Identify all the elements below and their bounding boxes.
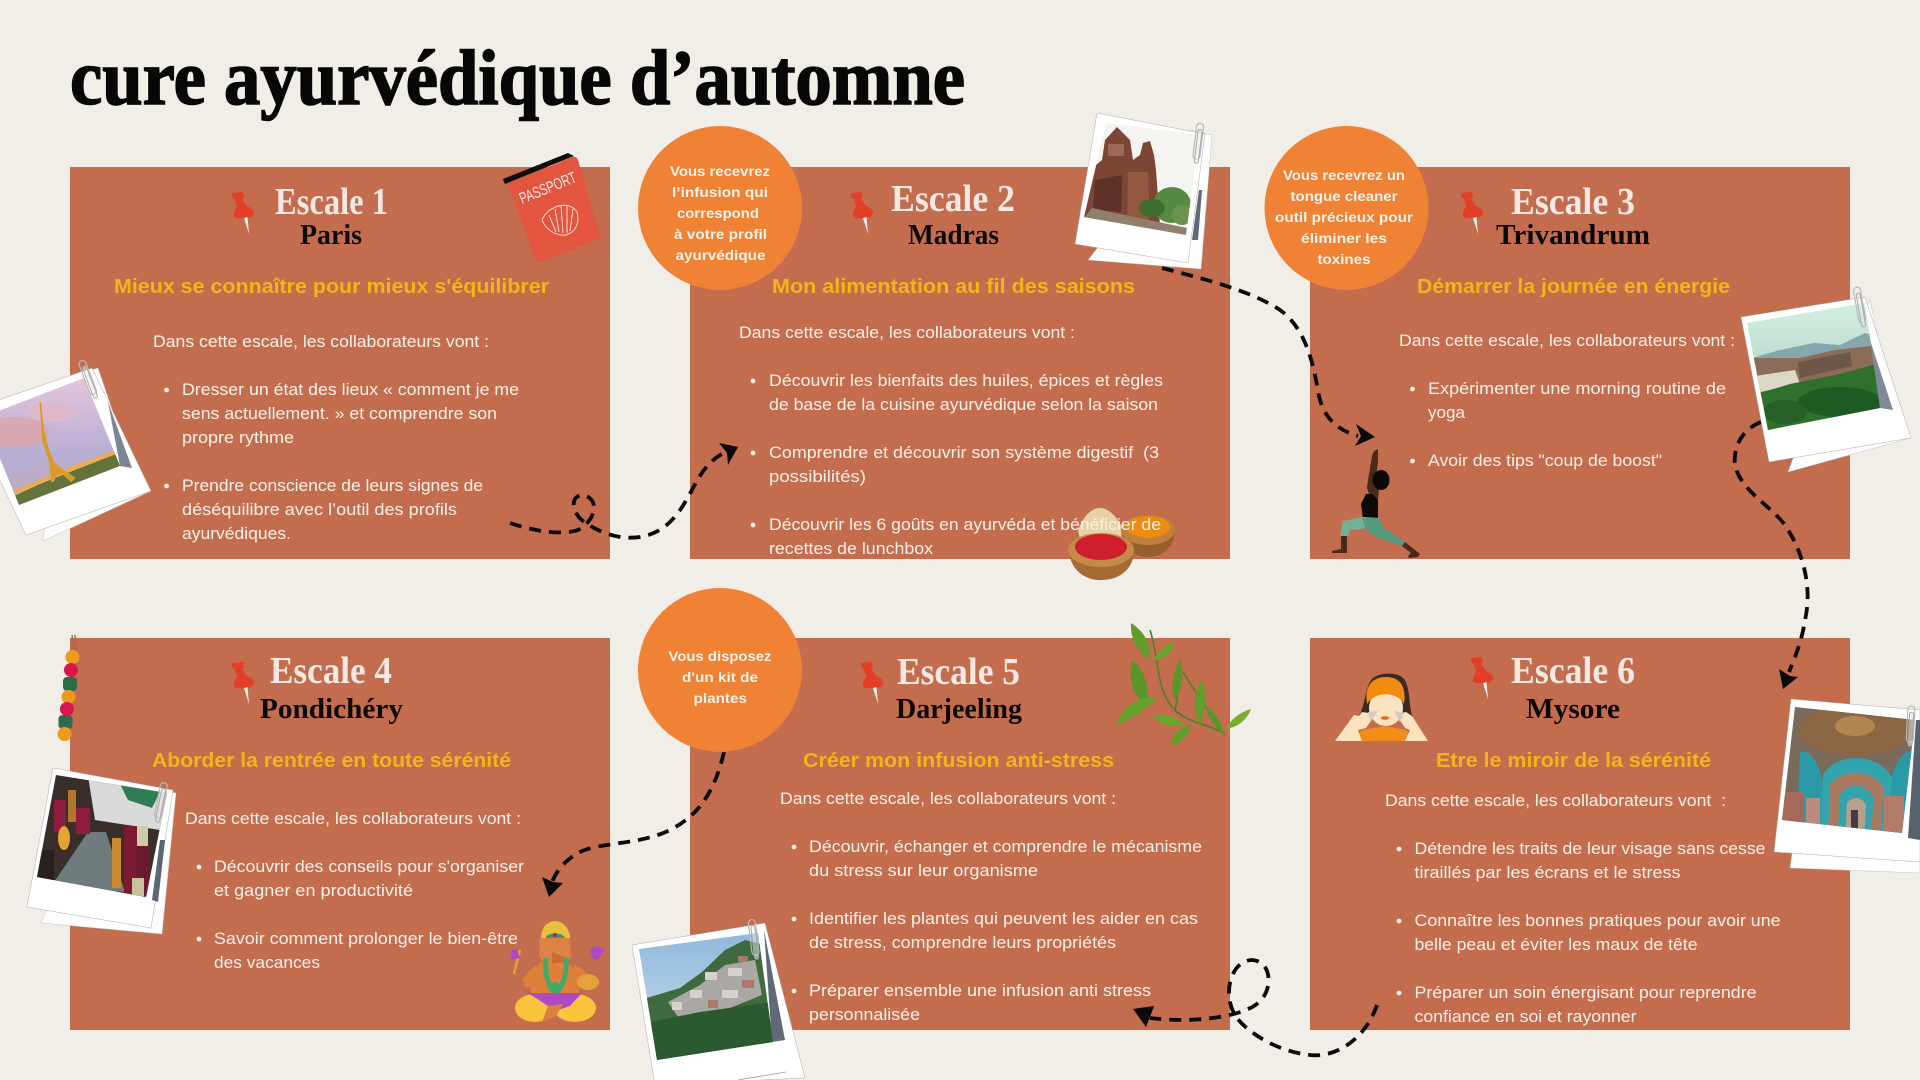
icon: pushpin Escale 6: [1471, 657, 1493, 699]
heading: Escale 3: Escale 3: [1511, 181, 1635, 223]
icon: pushpin Escale 2: [851, 192, 873, 234]
callout: tongue cleaner: outil précieux pour: [1275, 210, 1414, 225]
heading: Escale 1: Escale 1: [275, 181, 388, 223]
bullet list: Préparer un soin énergisant pour reprendre: [1414, 984, 1756, 1002]
arrow: Madras to Trivandrum: [1162, 268, 1375, 446]
bullet list: Découvrir des conseils pour s'organiser: [214, 858, 525, 876]
bullet list: belle peau et éviter les maux de tête: [1414, 936, 1698, 954]
icon: pushpin Escale 4: [232, 662, 254, 704]
polaroid: Paris: [0, 359, 151, 541]
intro text: Dans cette escale, les collaborateurs vont :: [780, 790, 1116, 808]
heading: Mysore: Mysore: [1526, 693, 1620, 725]
bullet list: sens actuellement. » et comprendre son: [182, 405, 497, 423]
bullet list: Découvrir les bienfaits des huiles, épices et règles: [769, 372, 1163, 390]
bullet list: du stress sur leur organisme: [809, 862, 1038, 880]
panel: Escale 6 Mysore: [1310, 638, 1850, 1030]
subtitle: Mieux se connaître pour mieux s'équilibrer: [114, 276, 549, 298]
heading: Paris: Paris: [300, 219, 362, 251]
bullet list: déséquilibre avec l’outil des profils: [182, 501, 457, 519]
callout: tongue cleaner: Vous recevrez un: [1283, 168, 1405, 183]
heading: Escale 4: Escale 4: [270, 650, 392, 692]
bullet list: ayurvédiques.: [182, 525, 291, 543]
icon: yoga figure: [1332, 449, 1420, 558]
callout: kit de plantes: [638, 588, 802, 752]
panel: Escale 1 Paris: [70, 167, 610, 559]
bullet list: Découvrir les 6 goûts en ayurvéda et bénéficier de: [769, 516, 1161, 534]
heading: Escale 6: Escale 6: [1511, 650, 1635, 692]
arrow: Trivandrum to Mysore: [1735, 422, 1808, 689]
subtitle: Démarrer la journée en énergie: [1417, 276, 1730, 298]
icon: pushpin Escale 5: [861, 662, 883, 704]
bullet list: [792, 838, 1202, 1024]
subtitle: Aborder la rentrée en toute sérénité: [152, 750, 511, 772]
polaroid: Madras: [1075, 113, 1212, 269]
bullet list: Découvrir, échanger et comprendre le mécanisme: [809, 838, 1202, 856]
icon: pushpin Escale 3: [1461, 192, 1483, 234]
bullet list: confiance en soi et rayonner: [1414, 1008, 1637, 1026]
heading: Pondichéry: Pondichéry: [260, 693, 403, 725]
title: cure ayurvédique d’automne: [70, 34, 965, 121]
callout: infusion: correspond: [677, 206, 759, 221]
bullet list: recettes de lunchbox: [769, 540, 934, 558]
callout: infusion: ayurvédique: [676, 248, 766, 263]
bullet list: propre rythme: [182, 429, 294, 447]
icon: Ganesha: [510, 921, 605, 1022]
bullet list: Avoir des tips "coup de boost": [1428, 452, 1662, 470]
heading: Escale 5: Escale 5: [897, 651, 1020, 693]
arrow: Mysore to Darjeeling: [1133, 960, 1377, 1055]
callout: tongue cleaner: [1264, 126, 1428, 290]
panel: Escale 3 Trivandrum: [1310, 167, 1850, 559]
callout: tongue cleaner: toxines: [1318, 252, 1370, 267]
callout: kit de plantes: Vous disposez: [668, 649, 772, 664]
red spice bowl: [1068, 533, 1134, 580]
bullet list: Identifier les plantes qui peuvent les aider en cas: [809, 910, 1198, 928]
bullet list: [197, 858, 525, 972]
bullet list: [1410, 380, 1726, 470]
icon: passport: [503, 153, 600, 262]
arrow: Darjeeling to Pondichéry: [542, 752, 724, 897]
icon: spice bowls: [1068, 508, 1175, 580]
heading: Darjeeling: Darjeeling: [896, 693, 1022, 725]
bullet list: Savoir comment prolonger le bien-être: [214, 930, 518, 948]
orange spice bowl: [1121, 515, 1175, 557]
bullet list: Préparer ensemble une infusion anti stress: [809, 982, 1151, 1000]
bullet list: [751, 372, 1163, 558]
intro text: Dans cette escale, les collaborateurs vont :: [185, 810, 521, 828]
subtitle: Créer mon infusion anti-stress: [803, 750, 1114, 772]
panel: Escale 5 Darjeeling: [690, 638, 1230, 1030]
heading: Escale 2: Escale 2: [891, 178, 1015, 220]
callout: tongue cleaner: éliminer les: [1301, 231, 1387, 246]
callout: infusion: l’infusion qui: [672, 185, 768, 200]
intro text: Dans cette escale, les collaborateurs vont :: [1399, 332, 1735, 350]
bullet list: personnalisée: [809, 1006, 920, 1024]
bullet list: de stress, comprendre leurs propriétés: [809, 934, 1116, 952]
bullet list: possibilités): [769, 468, 866, 486]
polaroid: Darjeeling: [632, 919, 805, 1080]
bullet list: tiraillés par les écrans et le stress: [1414, 864, 1680, 882]
bullet list: de base de la cuisine ayurvédique selon la saison: [769, 396, 1158, 414]
panel: Escale 2 Madras: [690, 167, 1230, 580]
callout: tongue cleaner: tongue cleaner: [1290, 189, 1398, 204]
icon: woman with face mask: [1335, 674, 1428, 741]
callout: infusion: à votre profil: [674, 227, 767, 242]
heading: Trivandrum: Trivandrum: [1496, 219, 1650, 251]
bullet list: des vacances: [214, 954, 320, 972]
bullet list: [164, 381, 519, 543]
polaroid: Mysore: [1774, 699, 1920, 873]
icon: passport: PASSPORT: [517, 169, 579, 208]
polaroid: Pondichéry: [27, 768, 176, 934]
callout: infusion: [638, 126, 802, 290]
callout: kit de plantes: plantes: [694, 691, 747, 706]
callout: infusion: Vous recevrez: [670, 164, 770, 179]
bullet list: et gagner en productivité: [214, 882, 413, 900]
bullet list: Expérimenter une morning routine de: [1428, 380, 1726, 398]
intro text: Dans cette escale, les collaborateurs vont :: [153, 333, 489, 351]
icon: flower garland: [58, 635, 80, 741]
bullet list: Détendre les traits de leur visage sans cesse: [1414, 840, 1766, 858]
subtitle: Mon alimentation au fil des saisons: [772, 276, 1135, 298]
bullet list: yoga: [1428, 404, 1466, 422]
bullet list: Dresser un état des lieux « comment je me: [182, 381, 519, 399]
bullet list: Connaître les bonnes pratiques pour avoir une: [1414, 912, 1780, 930]
bullet list: Comprendre et découvrir son système digestif (3: [769, 444, 1159, 462]
icon: tea leaves: [1117, 623, 1251, 746]
callout: kit de plantes: d'un kit de: [682, 670, 759, 685]
icon: pushpin Escale 1: [232, 192, 254, 234]
polaroid: Trivandrum: [1741, 287, 1911, 472]
bullet list: Prendre conscience de leurs signes de: [182, 477, 483, 495]
arrow: Paris to Madras: [510, 443, 738, 538]
subtitle: Etre le miroir de la sérénité: [1436, 750, 1711, 772]
heading: Madras: Madras: [908, 219, 999, 251]
panel: Escale 4 Pondichéry: [70, 638, 610, 1030]
bullet list: [1397, 840, 1780, 1026]
intro text: Dans cette escale, les collaborateurs vont :: [1385, 792, 1726, 810]
intro text: Dans cette escale, les collaborateurs vont :: [739, 324, 1075, 342]
cream spice bowl: [1078, 508, 1124, 540]
